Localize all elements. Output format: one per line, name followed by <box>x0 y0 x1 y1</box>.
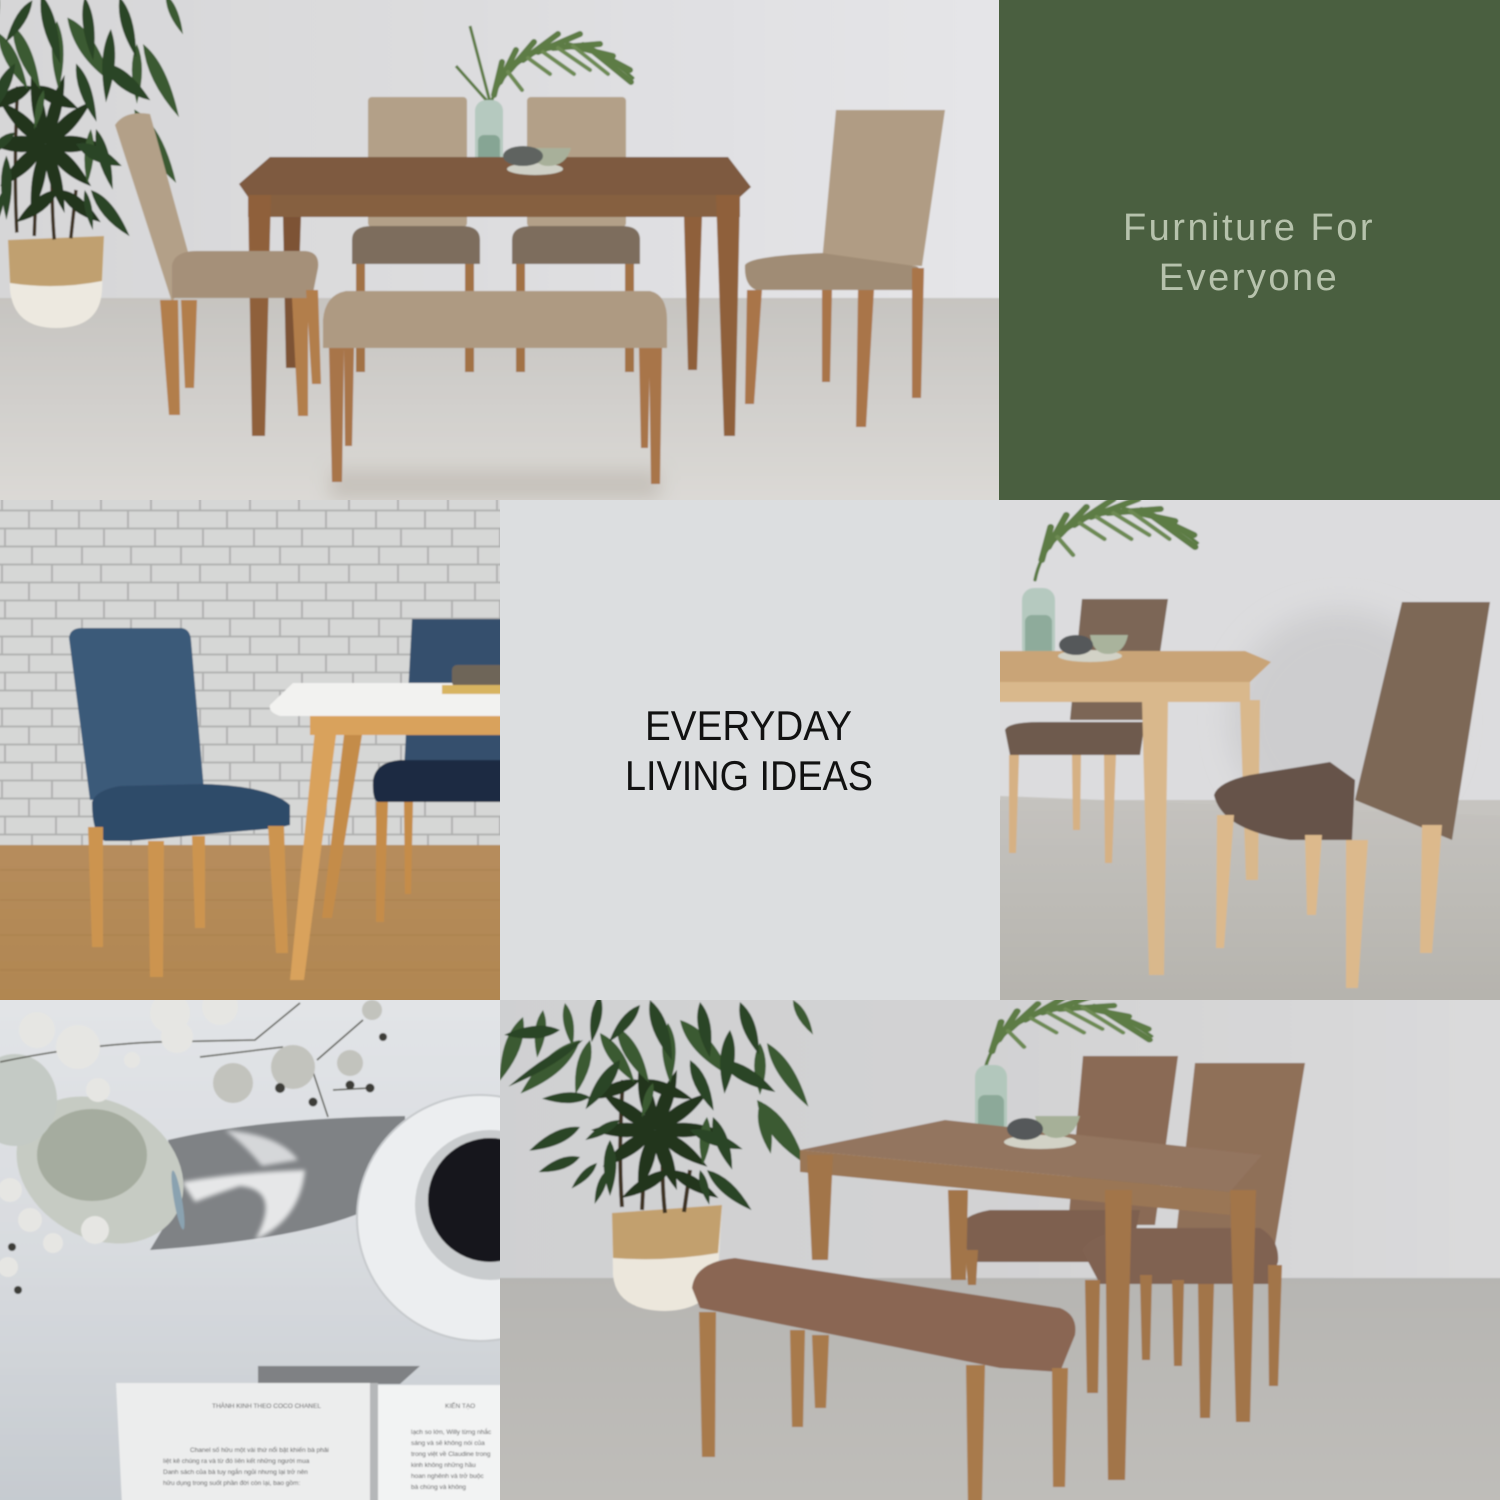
heading: Everyday Living Ideas: LIVING IDEAS <box>625 752 873 799</box>
navy chair, rear <box>373 619 505 922</box>
leather bench <box>692 1258 1075 1500</box>
glass vase <box>0 1054 185 1244</box>
photo: beige dining set with bench <box>0 0 1005 508</box>
book text: THÀNH KINH THEO COCO CHANEL <box>212 1401 321 1410</box>
photo: leather dining set with bench and plant <box>493 994 1500 1500</box>
book text: lạch so lớn, Willy từng nhắc <box>411 1427 492 1436</box>
heading: Furniture For Everyone: Furniture For <box>1123 207 1375 249</box>
table <box>800 1120 1262 1480</box>
leather chairs <box>961 1056 1305 1418</box>
coffee cup on saucer <box>355 1094 500 1342</box>
book text: kinh không những hầu <box>411 1460 476 1469</box>
tableware <box>1058 635 1128 662</box>
soft floor reflections <box>330 470 660 500</box>
natural table <box>995 651 1271 975</box>
heading: Furniture For Everyone: Everyone <box>1159 257 1339 299</box>
photo: blue chairs against brick wall <box>0 495 505 1005</box>
book text: hoan nghênh và trở buộc <box>411 1472 484 1480</box>
dried flowers <box>0 989 387 1294</box>
photo: brown leather chairs with natural table <box>995 495 1500 1005</box>
open book <box>116 1366 505 1500</box>
front brown chair <box>1214 602 1490 988</box>
tableware <box>503 146 571 175</box>
heading: Everyday Living Ideas: EVERYDAY <box>645 702 852 749</box>
book text: trong việt về Claudine trong <box>411 1449 491 1458</box>
rear brown chair <box>1005 599 1168 863</box>
blue chair <box>69 628 290 977</box>
plant in woven basket <box>0 0 186 328</box>
book text: Danh sách của bà tuy ngắn ngủi nhưng lại trở nên <box>163 1467 308 1476</box>
palm in glass vase <box>456 26 633 174</box>
book text: Chanel số hữu một vài thứ nổi bật khiến bà phải <box>190 1445 329 1454</box>
book text: hữu dụng trong suốt phần đời còn lại, bao gồm: <box>163 1478 300 1487</box>
book text: KIẾN TẠO <box>445 1400 475 1410</box>
potted plant <box>493 994 817 1311</box>
tableware <box>1004 1116 1080 1149</box>
book text: sáng và sẽ không nói của <box>411 1439 485 1447</box>
photo: flat-lay with vase, coffee and open book <box>0 1000 500 1500</box>
panel: grey heading <box>500 500 1000 1000</box>
heading: Everyday Living Ideas <box>625 702 873 799</box>
right chair <box>745 110 945 427</box>
book text: liệt kê chúng ra và từ đó liên kết những người mua <box>163 1456 310 1465</box>
book text <box>163 1400 492 1491</box>
panel: green heading <box>999 0 1500 500</box>
rear chairs <box>352 97 640 372</box>
white table <box>270 683 505 980</box>
plates <box>442 665 505 694</box>
palm and vase <box>1022 499 1197 660</box>
palm and vase <box>974 1000 1154 1128</box>
left chair <box>115 113 321 416</box>
table <box>239 157 751 436</box>
bench <box>323 291 667 484</box>
window shadow and caustic light <box>150 1116 405 1250</box>
book text: bà chúng và không <box>411 1484 466 1491</box>
